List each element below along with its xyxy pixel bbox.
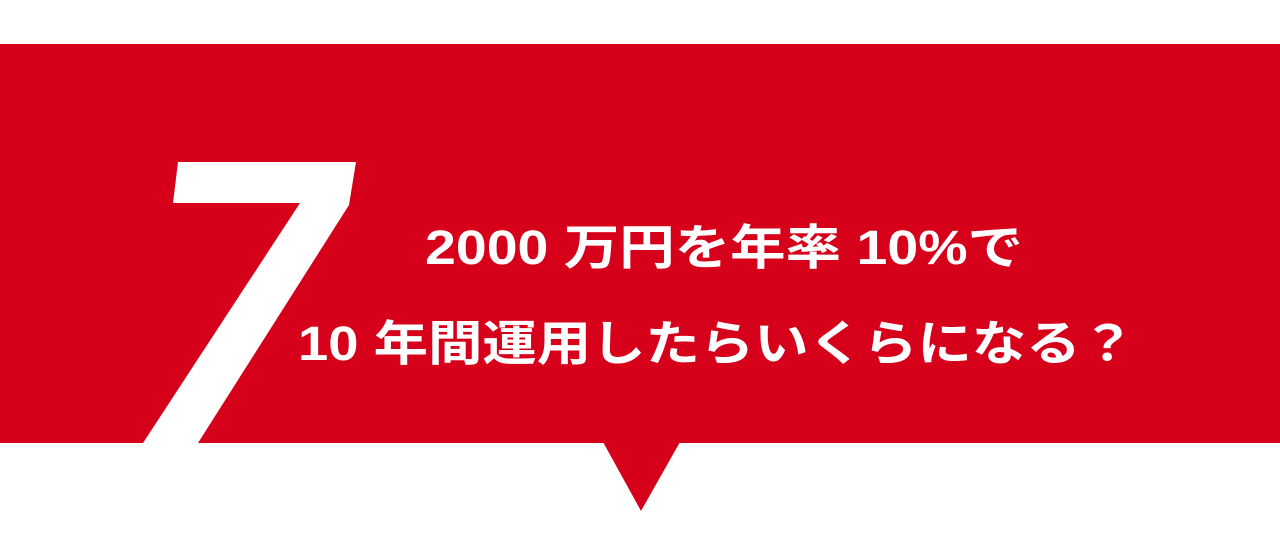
big number 7 — [143, 162, 356, 443]
speech pointer triangle — [603, 442, 680, 511]
headline text — [298, 222, 1135, 371]
headline text: 2000 万円を年率 10%で — [425, 222, 1023, 275]
headline text: 10 年間運用したらいくらになる？ — [298, 318, 1135, 371]
red banner — [0, 44, 1280, 443]
